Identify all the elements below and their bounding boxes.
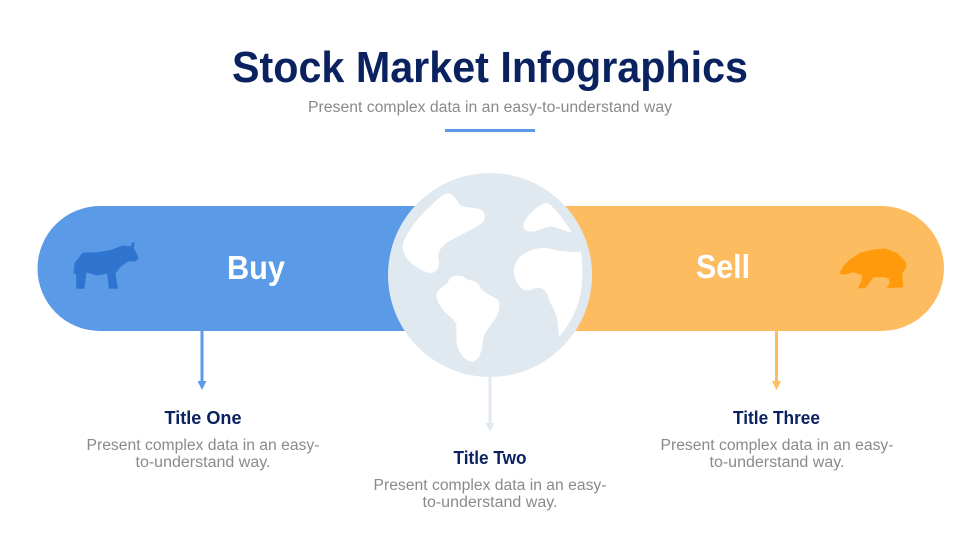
icon: globe [388,173,592,377]
text block: title three [660,408,894,471]
text block: title two: to-understand way. [422,494,558,511]
text block: title two: Title Two [454,448,526,468]
icon: bull [74,243,138,288]
arrow: title one [198,331,206,390]
text block: title one [86,408,320,471]
label: buy: Buy [227,249,286,286]
icon: bear [840,249,906,288]
title: Stock Market Infographics [232,43,748,92]
text block: title one: to-understand way. [136,454,270,471]
continent: north america [403,193,485,273]
text block: title two [374,448,606,511]
subtitle: Present complex data in an easy-to-understand way [308,99,672,116]
continent: south america [436,276,499,362]
title underline [445,129,535,132]
continent: greenland [523,203,572,232]
text block: title one: Present complex data in an easy- [86,437,320,454]
text block: title one: Title One [164,408,242,428]
text block: title three: Title Three [733,408,820,428]
text block: title three: Present complex data in an easy- [660,437,894,454]
text block: title three: to-understand way. [710,454,844,471]
continent: africa [514,248,582,337]
panel: sell bar [540,206,944,331]
text block: title two: Present complex data in an easy- [374,477,606,494]
arrow: title three [772,331,781,390]
arrow: title two [486,370,494,432]
panel: buy bar [38,206,440,331]
label: sell: Sell [696,248,750,285]
